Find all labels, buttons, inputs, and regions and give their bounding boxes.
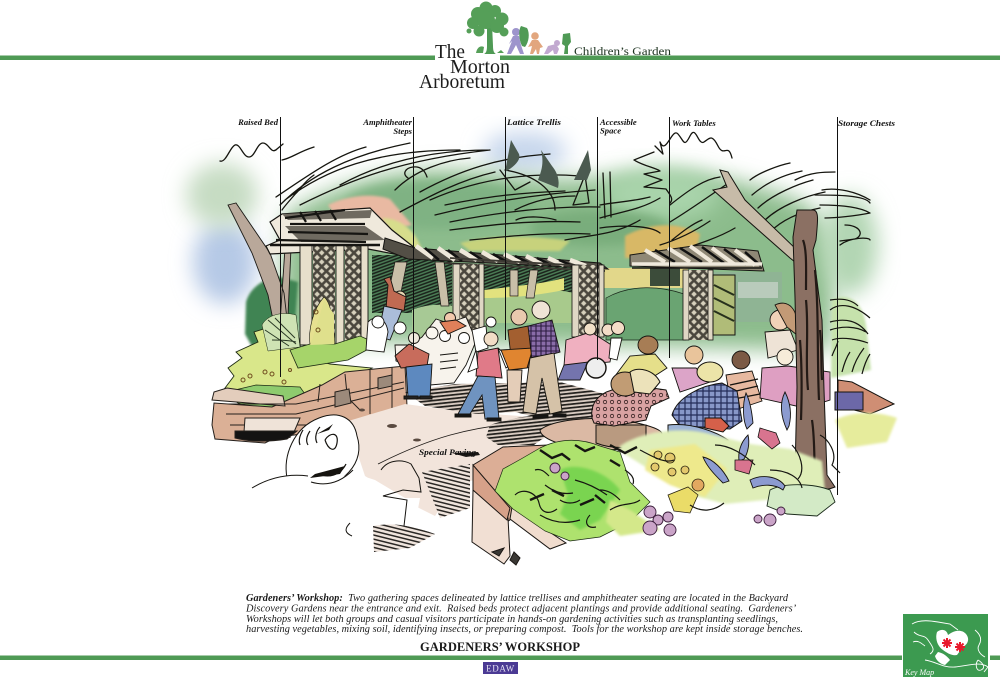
callout labels (237, 117, 896, 457)
dark conifer tips in canopy (505, 140, 591, 188)
pergola: middle (383, 238, 608, 340)
standing woman in pink (455, 332, 514, 421)
callout labels: Raised Bed (237, 117, 279, 127)
logo wordmark: Morton (450, 56, 510, 78)
callout labels: Steps (393, 126, 413, 136)
callout labels: Space (600, 126, 621, 136)
key map: Key Map (904, 668, 934, 677)
EDAW badge: EDAW (486, 664, 515, 674)
woman in patterned blouse (592, 369, 669, 426)
caption text block: Discovery Gardens near the entrance and exit. Raised beds protect adjacent plantings and provide additional seating. Gardeners’ (245, 604, 797, 614)
callout labels: Accessible (599, 117, 637, 127)
caption text block: harvesting vegetables, mixing soil, identifying insects, or preparing compost. Tools for the workshop are kept inside storage benches. (246, 624, 803, 635)
person in pink shirt (672, 346, 710, 392)
wheelchair audience (558, 322, 624, 380)
logo wordmark: The (435, 41, 465, 63)
white-clad audience group (366, 312, 496, 385)
paving (345, 382, 605, 518)
EDAW badge (483, 662, 518, 674)
caption text block: Workshops will let both groups and casual visitors participate in hands-on gardening activities such as transplanting seedlings, (246, 614, 778, 625)
illustration: gardeners' workshop sketch (186, 117, 897, 565)
pergola: right (630, 245, 764, 340)
watercolor washes (186, 132, 878, 350)
bottom heading: GARDENERS’ WORKSHOP (420, 640, 580, 654)
woman and seated figures at right (760, 303, 830, 408)
callout labels: Amphitheater (362, 117, 413, 127)
bottom green rule (0, 656, 1000, 660)
gardener in yellow (612, 336, 667, 386)
caption text block: Gardeners’ Workshop: Two gathering spaces delineated by lattice trellises and amphitheater seating are located in the Backyard (246, 593, 788, 604)
raised bed brick wall (212, 366, 407, 443)
raised bed planting (222, 300, 378, 411)
amphitheater seated audience (366, 277, 830, 421)
annotation leader lines (280, 117, 838, 495)
pergola: left (266, 208, 420, 345)
callout labels: Work Tables (672, 118, 716, 128)
logo wordmark: Arboretum (419, 71, 505, 93)
logo: The Morton Arboretum Children's Garden (419, 2, 671, 93)
work table and gardeners (540, 362, 742, 450)
dark-haired man (726, 351, 762, 411)
right foliage and storage chests (830, 297, 897, 448)
background foliage and shadow band (245, 255, 782, 352)
standing couple with basket (501, 309, 538, 402)
sketch hatching: tree canopy lines (220, 132, 870, 258)
top green rule (0, 56, 1000, 60)
man in plaid (672, 362, 742, 429)
callout labels: Special Paving (419, 447, 477, 457)
callout labels: Lattice Trellis (506, 117, 562, 127)
children's garden wordmark: Children’s Garden (574, 46, 671, 58)
tree trunk (713, 170, 835, 491)
key map (903, 614, 988, 677)
central raised planter (472, 445, 566, 565)
callout labels: Storage Chests (838, 118, 896, 128)
icon: walking children and plants (507, 26, 571, 54)
icon: tree (466, 2, 508, 54)
left tree branch (228, 203, 291, 345)
foreground man viewed from behind (251, 415, 435, 552)
foreground flower beds (495, 392, 840, 541)
logo wordmark (419, 41, 510, 93)
person on steps (378, 277, 406, 340)
seated man in jeans (395, 332, 432, 399)
